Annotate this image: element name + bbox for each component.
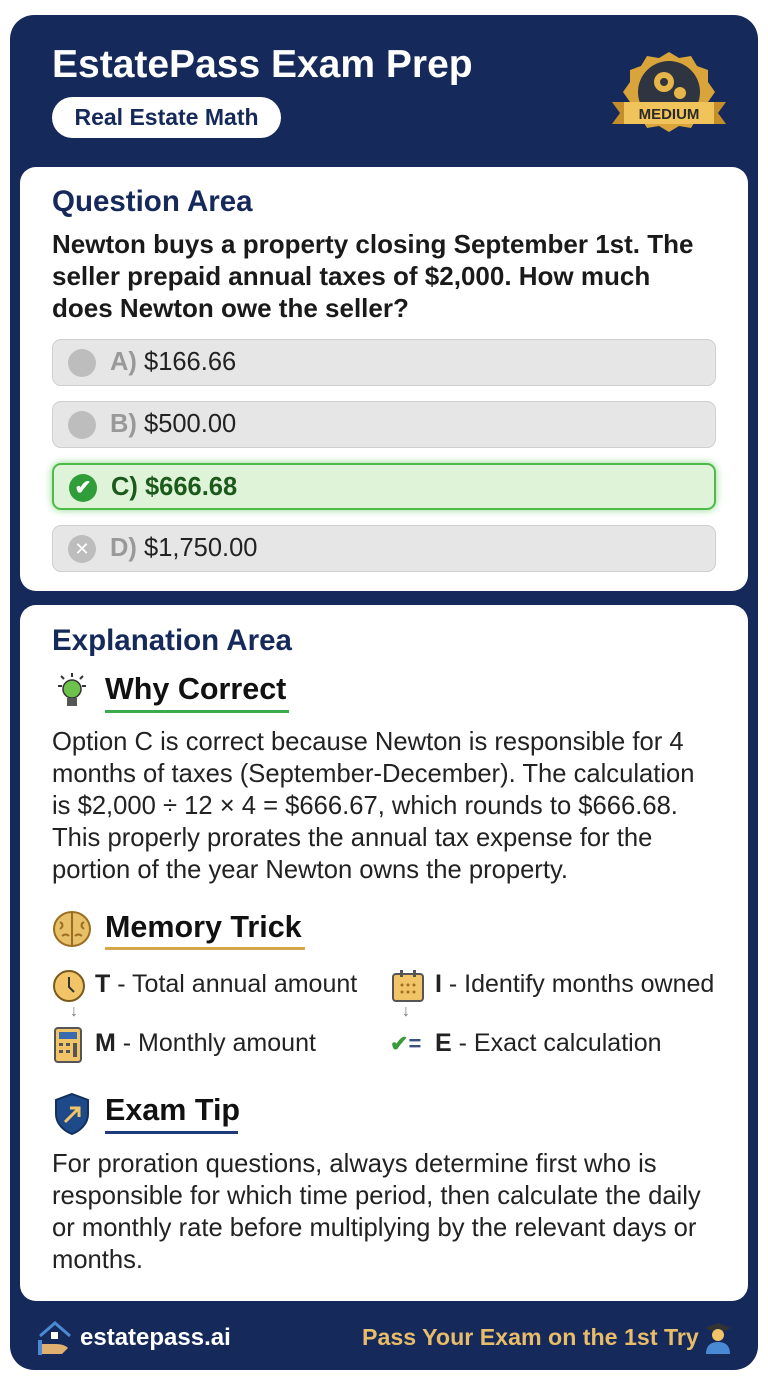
question text: does Newton owe the seller? [52,293,409,323]
explanation heading: Explanation Area [52,624,292,657]
option D: ✕ [74,539,90,559]
option B: B) $500.00 [110,410,236,438]
memory items: I - Identify months owned [435,970,714,998]
memory items: ↓ [402,1003,410,1020]
exam tip text: months. [52,1246,143,1274]
why correct text: is $2,000 ÷ 12 × 4 = $666.67, which rounds to $666.68. [52,792,678,820]
panel: question card [20,167,748,591]
exam tip text: For proration questions, always determine first who is [52,1150,657,1178]
memory items: ↓ [70,1003,78,1020]
option D [52,525,716,572]
option A: A) $166.66 [110,348,236,376]
icon: lightbulb [58,673,86,706]
icon: check equals: ✔= [390,1031,421,1056]
question text [52,229,693,323]
icon: calendar [392,970,424,1002]
footer logo [38,1321,231,1355]
exam tip heading: Exam Tip [105,1093,240,1127]
pill: category: Real Estate Math [74,104,259,130]
question text: Newton buys a property closing September 1st. The [52,229,693,259]
why correct text [52,728,695,884]
why correct text: Option C is correct because Newton is responsible for 4 [52,728,684,756]
memory items: T - Total annual amount [95,970,357,998]
memory trick heading: Memory Trick [105,910,302,944]
option A [52,339,716,386]
why correct heading: Why Correct [105,672,286,706]
question text: seller prepaid annual taxes of $2,000. How much [52,261,650,291]
option C correct: C) $666.68 [111,473,237,501]
exam tip text: responsible for which time period, then calculate the daily [52,1182,701,1210]
icon: brain [53,911,91,947]
footer tagline: Pass Your Exam on the 1st Try [362,1324,699,1350]
panel: explanation card [20,605,748,1301]
memory items: E - Exact calculation [435,1029,662,1057]
option D: D) $1,750.00 [110,534,257,562]
pill: category [52,97,281,138]
why correct text: months of taxes (September-December). The calculation [52,760,695,788]
title: EstatePass Exam Prep [52,43,473,86]
why correct text: portion of the year Newton owns the property. [52,856,568,884]
memory items [53,970,714,1063]
exam tip text [52,1150,701,1274]
badge: medium: MEDIUM [639,106,699,123]
badge: medium [612,52,726,132]
icon: clock [53,970,85,1002]
icon: shield [55,1092,89,1136]
question heading: Question Area [52,185,253,218]
option C correct [52,463,716,510]
footer logo: estatepass.ai [80,1324,231,1351]
memory items: M - Monthly amount [95,1029,316,1057]
option C correct: ✔ [75,477,91,499]
why correct text: This properly prorates the annual tax expense for the [52,824,652,852]
exam tip text: or monthly rate before multiplying by the relevant days or [52,1214,696,1242]
icon: graduate [706,1323,730,1354]
option B [52,401,716,448]
icon: calculator [54,1027,82,1063]
